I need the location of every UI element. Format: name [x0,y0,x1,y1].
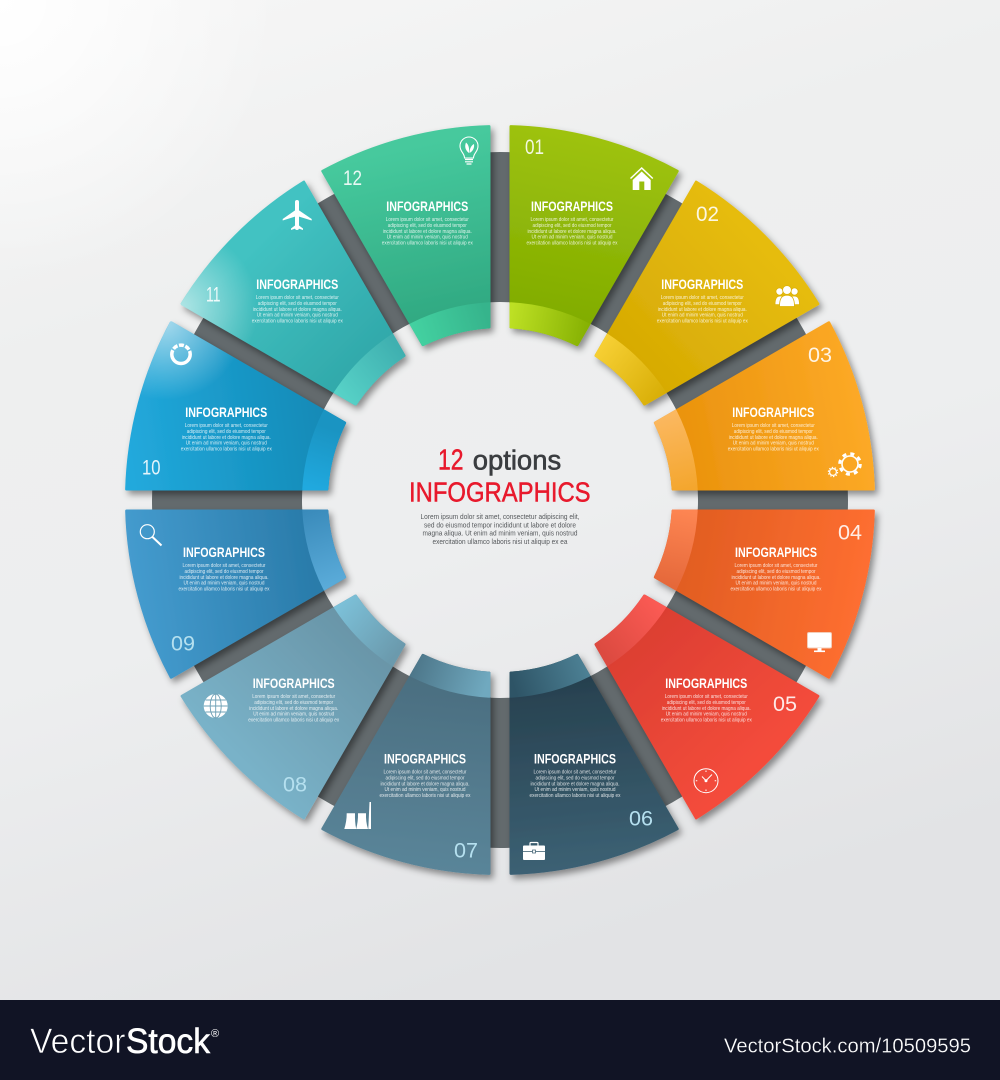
body text: adipiscing elit, sed do eiusmod tempor [187,429,266,435]
corner highlight [180,180,406,406]
body text [526,217,618,247]
number: 10 [142,456,160,479]
body text: Ut enim ad minim veniam, quis nostrud [532,235,612,241]
body text: exercitation ullamco laboris nisi ut aliquip ex [530,793,621,799]
icon: house [630,168,653,190]
body text: Ut enim ad minim veniam, quis nostrud [186,441,267,447]
body text: incididunt ut labore et dolore magna aliqua. [180,575,269,581]
body text: Ut enim ad minim veniam, quis nostrud [184,581,264,587]
title: 12 options: 12 [438,444,464,476]
number: 12 [343,167,362,190]
body text: Lorem ipsum dolor sit amet, consectetur [665,694,748,700]
body text: adipiscing elit, sed do eiusmod tempor [532,223,612,229]
body text: Ut enim ad minim veniam, quis nostrud [387,235,468,241]
heading: INFOGRAPHICS [386,198,468,214]
icon: light bulb [460,137,478,164]
heading: INFOGRAPHICS [185,404,267,420]
body text [380,770,471,799]
segment shape [511,126,677,345]
centre body text: exercitation ullamco laboris nisi ut aliquip ex ea [432,537,568,546]
body text [252,295,343,325]
centre title block [409,444,591,546]
body text: adipiscing elit, sed do eiusmod tempor [667,700,746,706]
heading: INFOGRAPHICS [735,544,817,560]
panel: segment 10 [125,321,347,490]
body text: exercitation ullamco laboris nisi ut aliquip ex [661,718,752,724]
panel: segment 04 [655,511,874,677]
body text: adipiscing elit, sed do eiusmod tempor [663,301,742,307]
body text: exercitation ullamco laboris nisi ut aliquip ex [728,447,819,453]
segment shape [182,182,404,404]
body text: exercitation ullamco laboris nisi ut aliquip ex [730,587,822,593]
body text: incididunt ut labore et dolore magna aliqua. [729,435,818,441]
segment shape [126,323,345,489]
number: 04 [838,521,862,544]
body text: Lorem ipsum dolor sit amet, consectetur [386,217,469,223]
title: 12 options [438,444,561,476]
body text: Ut enim ad minim veniam, quis nostrud [666,712,747,718]
body text [181,423,272,453]
body text: exercitation ullamco laboris nisi ut aliquip ex [252,319,343,325]
panel: segment 12 [323,126,489,345]
footer logo: ® [211,1028,219,1040]
heading: INFOGRAPHICS [183,544,265,560]
body text: incididunt ut labore et dolore magna aliqua. [732,575,821,581]
body text: adipiscing elit, sed do eiusmod tempor [736,569,816,575]
body text: adipiscing elit, sed do eiusmod tempor [734,429,813,435]
body text [657,295,748,325]
body text: Lorem ipsum dolor sit amet, consectetur [534,770,617,776]
segment shape [655,323,874,489]
body text: adipiscing elit, sed do eiusmod tempor [254,700,333,706]
body text [530,770,621,799]
body text [248,694,339,724]
number: 07 [454,840,478,863]
body text: adipiscing elit, sed do eiusmod tempor [386,775,465,781]
panel: segment 02 [596,182,818,404]
icon: people [775,286,800,306]
body text: incididunt ut labore et dolore magna aliqua. [383,229,472,235]
connector ring behind segments [227,227,773,773]
body text: incididunt ut labore et dolore magna aliqua. [182,435,271,441]
icon: gears [828,454,860,477]
number: 01 [525,136,544,159]
body text: Ut enim ad minim veniam, quis nostrud [384,787,466,793]
body text: Ut enim ad minim veniam, quis nostrud [733,441,814,447]
inner band [596,335,665,404]
body text: Ut enim ad minim veniam, quis nostrud [253,712,334,718]
body text [728,423,819,453]
centre body text: sed do eiusmod tempor incididunt ut labore et dolore [424,520,576,529]
body text: incididunt ut labore et dolore magna aliqua. [253,307,342,313]
icon: clock [694,769,718,793]
segment shape [323,655,489,874]
panel: segment 11 [180,180,406,406]
body text [382,217,473,247]
inner band [411,304,489,345]
heading: INFOGRAPHICS [732,404,814,420]
body text: incididunt ut labore et dolore magna aliqua. [249,706,339,712]
body text: Lorem ipsum dolor sit amet, consectetur [252,694,335,700]
icon: globe [204,694,228,718]
inner band [596,596,665,665]
body text: adipiscing elit, sed do eiusmod tempor [184,569,264,575]
body text [661,694,752,724]
footer logo: Vector [30,1022,126,1061]
heading: INFOGRAPHICS [531,198,613,214]
inner band [511,304,589,345]
number: 02 [696,203,719,226]
panel: segment 03 [655,323,874,489]
segment shape [511,655,677,874]
icon: power plant [344,802,371,829]
body text: adipiscing elit, sed do eiusmod tempor [258,301,337,307]
body text: exercitation ullamco laboris nisi ut aliquip ex [181,447,272,453]
body text: incididunt ut labore et dolore magna aliqua. [662,706,751,712]
title: INFOGRAPHICS: INFOGRAPHICS [409,477,591,508]
body text: incididunt ut labore et dolore magna aliqua. [658,307,747,313]
panel: segment 06 [511,655,677,874]
body text: exercitation ullamco laboris nisi ut aliquip ex [526,241,618,247]
body text: adipiscing elit, sed do eiusmod tempor [388,223,467,229]
segment shape [596,182,818,404]
body text: incididunt ut labore et dolore magna aliqua. [380,781,470,787]
body text: incididunt ut labore et dolore magna aliqua. [528,229,617,235]
icon: briefcase [523,842,545,860]
number: 05 [773,693,797,716]
number: 03 [808,344,832,367]
heading: INFOGRAPHICS [661,276,743,292]
inner band [335,596,404,665]
body text: Lorem ipsum dolor sit amet, consectetur [661,295,744,301]
number: 11 [206,284,220,307]
inner band [411,655,489,696]
body text: Lorem ipsum dolor sit amet, consectetur [185,423,268,429]
icon: airplane [283,200,312,230]
segment shape [126,511,345,677]
panel: segment 01 [511,126,677,345]
inner band [335,335,404,404]
body text: exercitation ullamco laboris nisi ut aliquip ex [382,241,473,247]
body text: adipiscing elit, sed do eiusmod tempor [536,775,615,781]
segment shape [655,511,874,677]
body text: Ut enim ad minim veniam, quis nostrud [534,787,616,793]
panel: segment 09 [126,511,345,677]
footer logo: Stock [126,1022,210,1061]
heading: INFOGRAPHICS [384,750,466,766]
body text: Lorem ipsum dolor sit amet, consectetur [384,770,467,776]
body text: Ut enim ad minim veniam, quis nostrud [662,313,743,319]
number: 06 [629,808,653,831]
body text: incididunt ut labore et dolore magna aliqua. [530,781,620,787]
segment shape [323,126,489,345]
panel: segment 07 [323,655,489,874]
icon: donut chart [172,345,190,363]
body text [178,563,270,593]
centre body text [420,512,580,546]
heading: INFOGRAPHICS [256,276,338,292]
inner band [304,411,345,489]
body text: Lorem ipsum dolor sit amet, consectetur [182,563,266,569]
segment shape [182,596,404,818]
body text: Ut enim ad minim veniam, quis nostrud [736,581,816,587]
title: 12 options: options [473,444,561,475]
body text: Lorem ipsum dolor sit amet, consectetur [530,217,614,223]
centre body text: Lorem ipsum dolor sit amet, consectetur adipiscing elit, [420,512,580,521]
inner band [655,411,696,489]
heading: INFOGRAPHICS [665,675,747,691]
footer bar [0,1000,1000,1080]
footer url: VectorStock.com/10509595 [724,1036,971,1058]
body text: exercitation ullamco laboris nisi ut aliquip ex [657,319,748,325]
number: 08 [283,774,307,797]
corner highlight [125,321,347,490]
segment shape [596,596,818,818]
inner band [511,655,589,696]
body text: Lorem ipsum dolor sit amet, consectetur [734,563,818,569]
body text [730,563,822,593]
heading: INFOGRAPHICS [253,675,335,691]
inner band [304,511,345,589]
icon: magnifier [140,525,162,546]
body text: exercitation ullamco laboris nisi ut aliquip ex [380,793,471,799]
body text: exercitation ullamco laboris nisi ut aliquip ex [178,587,270,593]
body text: exercitation ullamco laboris nisi ut aliquip ex [248,718,339,724]
heading: INFOGRAPHICS [534,750,616,766]
body text: Lorem ipsum dolor sit amet, consectetur [732,423,815,429]
panel: segment 05 [596,596,818,818]
inner band [655,511,696,589]
footer logo [30,1022,219,1061]
icon: monitor [808,632,832,652]
centre body text: magna aliqua. Ut enim ad minim veniam, quis nostrud [422,529,578,538]
body text: Lorem ipsum dolor sit amet, consectetur [256,295,339,301]
panel: segment 08 [182,596,404,818]
number: 09 [171,633,195,656]
body text: Ut enim ad minim veniam, quis nostrud [257,313,338,319]
